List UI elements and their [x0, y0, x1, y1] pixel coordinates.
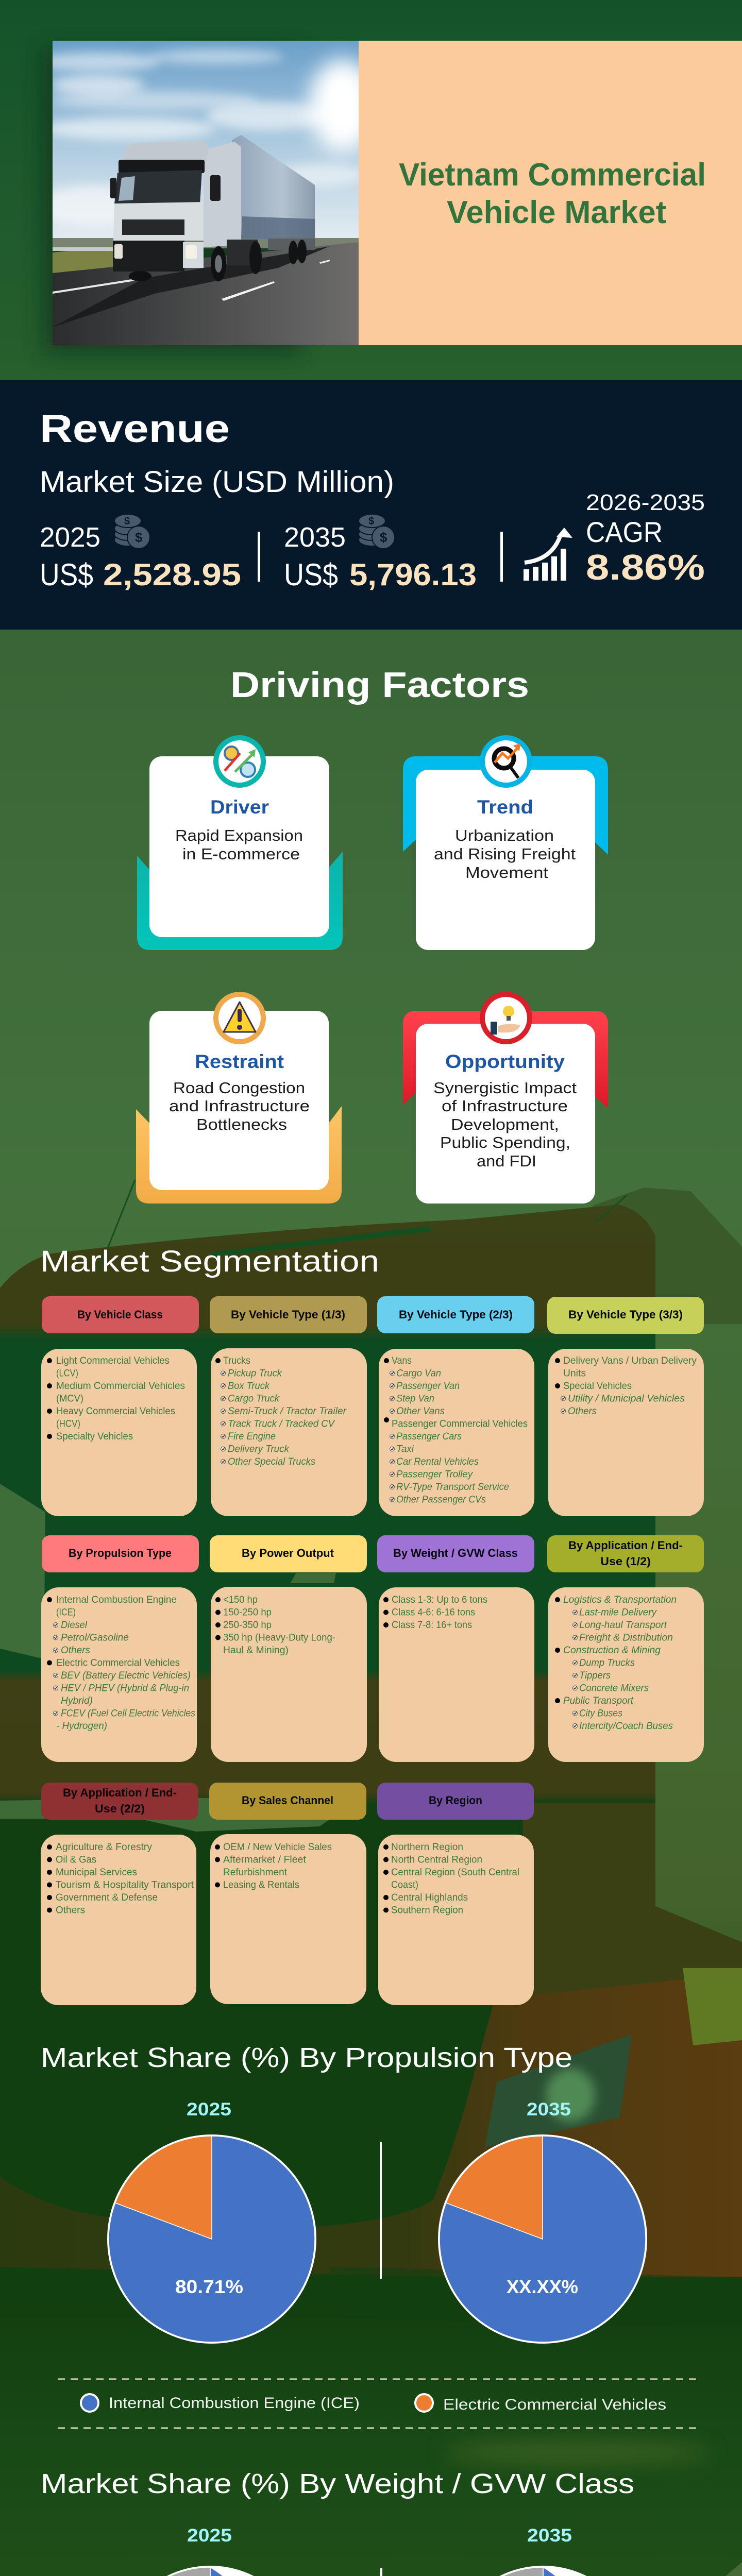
segment: by vehicle type 1 of 3: Fire Engine	[228, 1431, 276, 1442]
pie chart: propulsion 2035	[438, 2099, 647, 2344]
segment: by vehicle class: By Vehicle Class	[77, 1308, 163, 1321]
segment: by application 2 of 2: Oil & Gas	[56, 1855, 96, 1865]
segment: by weight gvw class: Class 1-3: Up to 6 tons	[392, 1595, 487, 1605]
segment: by region: Central Highlands	[391, 1892, 468, 1903]
segment: by vehicle class	[41, 1296, 199, 1516]
segment: by vehicle class: (HCV)	[56, 1419, 80, 1429]
pie chart: propulsion 2035: 2035	[527, 2099, 571, 2120]
restraint title: Restraint	[195, 1051, 284, 1072]
segment: by application 1 of 2: Long-haul Transport	[579, 1620, 667, 1631]
trend text	[434, 826, 576, 882]
icon: driver gears and arrows	[213, 735, 266, 788]
segment: by application 1 of 2: City Buses	[579, 1708, 622, 1719]
segment: by vehicle type 1 of 3: Box Truck	[228, 1381, 270, 1392]
divider	[500, 532, 503, 582]
CAGR block: 2026-2035	[586, 490, 705, 515]
segment: by propulsion type	[41, 1535, 199, 1762]
segment: by vehicle type 1 of 3: By Vehicle Type (1/3)	[231, 1308, 345, 1321]
segment: by application 1 of 2: Last-mile Delivery	[579, 1607, 657, 1618]
icon: restraint warning triangle	[213, 992, 266, 1044]
icon: opportunity bulb and hand	[480, 992, 532, 1044]
value 2025: 2,528.95	[103, 557, 241, 592]
segment: by vehicle type 1 of 3: Track Truck / Tracked CV	[228, 1419, 335, 1429]
pie chart: propulsion 2025: 2025	[187, 2099, 231, 2120]
opportunity text: and FDI	[477, 1152, 536, 1170]
driver text	[175, 826, 303, 863]
pie chart: propulsion 2025	[107, 2099, 316, 2344]
segment: by application 1 of 2: Tippers	[579, 1670, 611, 1681]
title panel	[359, 41, 742, 345]
segment: by vehicle type 3 of 3: Delivery Vans / Urban Delivery	[563, 1355, 697, 1366]
pie chart: weight 2025: 2025	[187, 2526, 232, 2546]
divider	[380, 2568, 382, 2576]
icon: coins 2025: $	[135, 530, 143, 545]
pie chart: weight 2035	[446, 2526, 640, 2576]
icon: growth chart arrow	[524, 528, 572, 581]
segment: by application 1 of 2: Dump Trucks	[579, 1658, 635, 1668]
restraint text: Bottlenecks	[196, 1115, 287, 1133]
opportunity title: Opportunity	[445, 1051, 565, 1072]
opportunity text: Synergistic Impact	[433, 1079, 577, 1097]
segment: by vehicle class: Light Commercial Vehicles	[56, 1355, 170, 1366]
revenue band	[0, 380, 742, 630]
title panel: Vietnam Commercial	[399, 157, 706, 193]
segment: by power output: 350 hp (Heavy-Duty Long-	[223, 1632, 335, 1643]
segment: by propulsion type: Internal Combustion Engine	[56, 1595, 177, 1605]
segment: by region: Southern Region	[391, 1905, 463, 1916]
segment: by application 1 of 2: Logistics & Transportation	[563, 1595, 677, 1605]
restraint text: Road Congestion	[173, 1079, 305, 1097]
legend: propulsion: Internal Combustion Engine (ICE)	[109, 2395, 360, 2412]
segment: by application 1 of 2: Freight & Distribution	[579, 1632, 673, 1643]
segment: by vehicle type 1 of 3	[210, 1296, 367, 1516]
legend: propulsion: Electric Commercial Vehicles	[443, 2396, 666, 2413]
segment: by vehicle type 2 of 3: Taxi	[396, 1444, 414, 1455]
segment: by application 1 of 2	[547, 1535, 704, 1762]
segment: by vehicle type 1 of 3: Semi-Truck / Tractor Trailer	[228, 1406, 347, 1417]
segment: by vehicle type 2 of 3	[377, 1296, 534, 1516]
segment: by weight gvw class	[377, 1535, 534, 1762]
segment: by vehicle type 2 of 3: Passenger Cars	[396, 1431, 462, 1442]
trend text: Movement	[465, 863, 548, 882]
value 2035	[284, 522, 477, 592]
segment: by application 2 of 2: Others	[56, 1905, 85, 1916]
revenue heading: Revenue	[40, 407, 230, 451]
segment: by vehicle class: Medium Commercial Vehicles	[56, 1381, 185, 1392]
segment: by power output	[210, 1535, 367, 1762]
segment: by power output: <150 hp	[223, 1595, 258, 1605]
CAGR block	[586, 490, 705, 587]
icon: trend magnifier	[480, 735, 532, 788]
segment: by application 1 of 2: Use (1/2)	[600, 1555, 651, 1568]
trend text: and Rising Freight	[434, 845, 576, 863]
segment: by vehicle type 2 of 3: RV-Type Transport Service	[396, 1482, 509, 1493]
icon: coins 2035: $	[368, 516, 374, 527]
segment: by vehicle type 2 of 3: Step Van	[396, 1393, 434, 1404]
segment: by sales channel: OEM / New Vehicle Sales	[223, 1842, 332, 1853]
divider	[380, 2142, 382, 2279]
segment: by region: By Region	[429, 1794, 482, 1807]
segment: by region: Coast)	[391, 1879, 418, 1891]
hero photo: truck on highway	[36, 41, 376, 353]
driver text: Rapid Expansion	[175, 826, 303, 844]
segment: by weight gvw class: Class 7-8: 16+ tons	[392, 1620, 472, 1631]
card: restraint	[136, 992, 342, 1204]
card: driver	[137, 735, 343, 950]
divider	[258, 532, 260, 582]
CAGR block: CAGR	[586, 516, 663, 548]
trend title: Trend	[477, 796, 533, 818]
segment: by region	[377, 1783, 534, 2005]
segment: by application 1 of 2: By Application / End-	[568, 1539, 683, 1552]
segment: by application 1 of 2: Public Transport	[563, 1696, 634, 1706]
segment: by vehicle type 3 of 3: Others	[568, 1406, 597, 1417]
legend: propulsion	[81, 2394, 666, 2413]
segment: by propulsion type: BEV (Battery Electric Vehicles)	[61, 1670, 191, 1681]
restraint text	[169, 1079, 310, 1133]
segment: by vehicle type 2 of 3: Vans	[392, 1355, 412, 1366]
opportunity text: of Infrastructure	[442, 1097, 568, 1115]
segment: by application 2 of 2: Tourism & Hospitality Transport	[56, 1879, 194, 1891]
segment: by vehicle type 3 of 3: Utility / Municipal Vehicles	[568, 1393, 685, 1404]
opportunity text	[433, 1079, 577, 1170]
segment: by vehicle type 2 of 3: Passenger Commercial Vehicles	[392, 1419, 528, 1429]
segment: by vehicle type 2 of 3: Other Passenger CVs	[396, 1494, 486, 1505]
segment: by vehicle type 3 of 3: By Vehicle Type (3/3)	[568, 1308, 683, 1321]
segment: by propulsion type: By Propulsion Type	[69, 1547, 172, 1560]
opportunity text: Development,	[451, 1115, 559, 1133]
segment: by vehicle type 1 of 3: Trucks	[223, 1355, 250, 1366]
heading: market share by propulsion type: Market Share (%) By Propulsion Type	[41, 2042, 572, 2073]
segment: by vehicle class: Specialty Vehicles	[56, 1431, 133, 1442]
value 2035: 5,796.13	[349, 557, 477, 592]
pie chart: weight 2025	[113, 2526, 308, 2576]
segment: by application 1 of 2: Intercity/Coach Buses	[579, 1721, 673, 1732]
CAGR block: 8.86%	[586, 547, 705, 587]
heading: market segmentation: Market Segmentation	[40, 1245, 379, 1278]
segment: by application 2 of 2: Use (2/2)	[95, 1802, 145, 1815]
card: trend	[403, 735, 608, 950]
segment: by application 2 of 2: Agriculture & Forestry	[56, 1842, 152, 1853]
segment: by weight gvw class: By Weight / GVW Class	[393, 1547, 518, 1560]
segment: by power output: 150-250 hp	[223, 1607, 272, 1618]
segment: by application 2 of 2: Government & Defense	[56, 1892, 158, 1903]
segment: by vehicle type 2 of 3: Passenger Trolley	[396, 1469, 473, 1480]
segment: by propulsion type: Diesel	[61, 1620, 88, 1631]
pie chart: propulsion 2035: XX.XX%	[507, 2276, 578, 2297]
segment: by propulsion type: HEV / PHEV (Hybrid & Plug-in	[61, 1683, 189, 1694]
pie chart: weight 2035: 2035	[527, 2526, 572, 2546]
segment: by weight gvw class: Class 4-6: 6-16 tons	[392, 1607, 475, 1618]
segment: by vehicle type 2 of 3: Passenger Van	[396, 1381, 460, 1392]
restraint text: and Infrastructure	[169, 1097, 310, 1115]
segment: by application 2 of 2: By Application / End-	[63, 1786, 177, 1799]
segment: by vehicle type 1 of 3: Delivery Truck	[228, 1444, 290, 1455]
segment: by propulsion type: Hybrid)	[61, 1696, 93, 1706]
segment: by power output: 250-350 hp	[223, 1620, 272, 1631]
segment: by vehicle type 1 of 3: Cargo Truck	[228, 1393, 280, 1404]
segment: by propulsion type: FCEV (Fuel Cell Electric Vehicles	[61, 1708, 195, 1719]
pie chart: propulsion 2025: 80.71%	[175, 2276, 243, 2297]
segment: by vehicle type 2 of 3: Other Vans	[396, 1406, 445, 1417]
heading: market share by weight: Market Share (%) By Weight / GVW Class	[41, 2468, 634, 2499]
segment: by propulsion type: (ICE)	[56, 1607, 76, 1618]
driver title: Driver	[210, 796, 269, 818]
trend text: Urbanization	[455, 826, 554, 844]
segment: by application 2 of 2	[41, 1783, 198, 2005]
segment: by region: North Central Region	[391, 1855, 482, 1865]
segment: by vehicle type 3 of 3: Units	[563, 1368, 586, 1379]
segment: by sales channel: Leasing & Rentals	[223, 1879, 299, 1891]
value 2035: 2035	[284, 522, 346, 553]
segment: by propulsion type: Electric Commercial Vehicles	[56, 1658, 180, 1668]
segment: by region: Northern Region	[391, 1842, 463, 1853]
segment: by vehicle type 2 of 3: By Vehicle Type (2/3)	[399, 1308, 513, 1321]
segment: by power output: By Power Output	[242, 1547, 334, 1560]
value 2025: US$	[40, 557, 93, 592]
icon: coins 2035: $	[380, 530, 387, 545]
segment: by vehicle type 3 of 3: Special Vehicles	[563, 1381, 632, 1392]
heading: driving factors: Driving Factors	[230, 665, 529, 705]
segment: by sales channel: Refurbishment	[223, 1867, 288, 1878]
segment: by propulsion type: Petrol/Gasoline	[61, 1632, 129, 1643]
title panel: Vehicle Market	[447, 195, 666, 230]
segment: by propulsion type: Others	[61, 1645, 90, 1656]
segment: by vehicle type 2 of 3: Cargo Van	[396, 1368, 441, 1379]
driver text: in E-commerce	[182, 845, 300, 863]
icon: coins 2035	[359, 514, 395, 549]
segment: by application 2 of 2: Municipal Services	[56, 1867, 137, 1878]
opportunity text: Public Spending,	[440, 1133, 570, 1151]
segment: by vehicle class: Heavy Commercial Vehicles	[56, 1406, 175, 1417]
segment: by vehicle type 2 of 3: Car Rental Vehicles	[396, 1456, 479, 1467]
segment: by region: Central Region (South Central	[391, 1867, 519, 1878]
market size label: Market Size (USD Million)	[40, 465, 394, 499]
segment: by sales channel: By Sales Channel	[242, 1794, 333, 1807]
value 2025	[40, 522, 241, 592]
segment: by vehicle class: (LCV)	[56, 1368, 78, 1379]
value 2035: US$	[284, 557, 338, 592]
value 2025: 2025	[40, 522, 100, 553]
card: opportunity	[403, 992, 608, 1204]
segment: by propulsion type: - Hydrogen)	[56, 1721, 107, 1732]
segment: by vehicle class: (MCV)	[56, 1393, 83, 1404]
segment: by sales channel: Aftermarket / Fleet	[223, 1855, 307, 1865]
segment: by power output: Haul & Mining)	[223, 1645, 289, 1656]
segment: by application 1 of 2: Concrete Mixers	[579, 1683, 649, 1694]
icon: coins 2025	[114, 514, 150, 549]
segment: by vehicle type 1 of 3: Pickup Truck	[228, 1368, 282, 1379]
segment: by application 1 of 2: Construction & Mining	[563, 1645, 661, 1656]
segment: by sales channel	[209, 1783, 366, 2004]
segment: by vehicle type 3 of 3	[547, 1297, 704, 1516]
segment: by vehicle type 1 of 3: Other Special Trucks	[228, 1456, 315, 1467]
icon: coins 2025: $	[124, 516, 130, 527]
